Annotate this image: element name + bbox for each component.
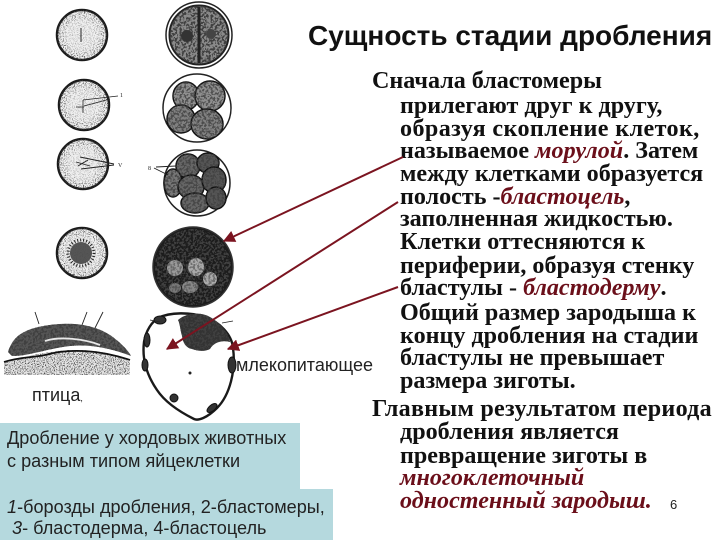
- egg cell 3: [58, 139, 123, 189]
- main text block: превращение зиготы в: [400, 443, 647, 469]
- mammal blastocyst: [142, 313, 236, 420]
- main text block: полость -бластоцель,: [400, 184, 630, 210]
- main text block: многоклеточный: [400, 465, 584, 491]
- main text block: Клетки оттесняются к: [400, 229, 645, 255]
- egg cell 1: [57, 10, 107, 60]
- caption text: legend: [7, 497, 325, 538]
- main text block: заполненная жидкостью.: [400, 206, 673, 232]
- main text block: прилегают друг к другу,: [400, 93, 662, 119]
- main text block: Общий размер зародыша к: [400, 300, 696, 326]
- main text block: называемое морулой. Затем: [400, 138, 698, 164]
- trophoblast nuclei along the wall: [142, 316, 236, 414]
- egg cell 2: 1: [120, 93, 123, 99]
- caption text: legend: 3- бластодерма, 4-бластоцель: [12, 518, 266, 538]
- caption box: legend: [0, 489, 333, 540]
- egg cell 4 with radial centre: [57, 228, 107, 278]
- caption box: cleavage in chordates: [0, 423, 300, 493]
- label: mammal: млекопитающее: [236, 355, 373, 375]
- egg cell 2: [59, 80, 123, 130]
- two-cell embryo: [166, 2, 232, 68]
- four-cell embryo: [163, 74, 231, 142]
- main text block: Сначала бластомеры: [372, 68, 602, 94]
- page number: 6: [670, 497, 677, 512]
- main text block: бластулы не превышает: [400, 345, 664, 371]
- arrow to blastocoel: [167, 202, 398, 349]
- arrow to blastoderm: [228, 287, 398, 349]
- main text block: одностенный зародыш.: [400, 488, 652, 514]
- eight-cell embryo: 8: [148, 166, 151, 172]
- caption text: cleavage in chordates: [7, 428, 286, 471]
- caption text: cleavage in chordates: с разным типом яйцеклетки: [7, 451, 240, 471]
- main text block: концу дробления на стадии: [400, 323, 698, 349]
- main text block: бластулы - бластодерму.: [400, 275, 666, 301]
- bird embryo on yolk: [4, 312, 131, 375]
- caption text: legend: 1-борозды дробления, 2-бластомеры,: [7, 497, 325, 517]
- label: bird: птица,: [32, 385, 83, 405]
- main text block: Главным результатом периода: [372, 396, 712, 422]
- arrow to morula: [224, 157, 403, 241]
- title: Сущность стадии дробления: [308, 20, 712, 51]
- main text block: периферии, образуя стенку: [400, 253, 694, 279]
- egg cell 3: V: [118, 163, 123, 169]
- main text block: размера зиготы.: [400, 368, 576, 394]
- caption text: cleavage in chordates: Дробление у хордовых животных: [7, 428, 286, 448]
- main text block: дробления является: [400, 419, 619, 445]
- eight-cell embryo: [148, 150, 230, 216]
- main text block: образуя скопление клеток,: [400, 116, 700, 142]
- main text block: между клетками образуется: [400, 161, 703, 187]
- morula: [153, 227, 233, 307]
